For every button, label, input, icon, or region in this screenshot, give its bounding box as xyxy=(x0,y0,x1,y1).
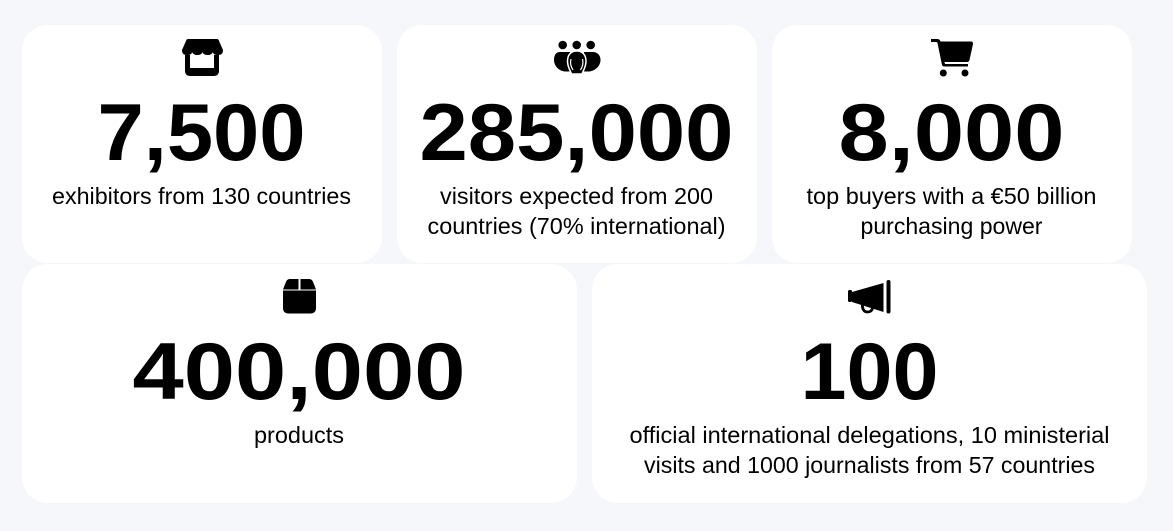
panel: delegations: visits and 1000 journalists from 57 countries xyxy=(644,452,1095,478)
panel: exhibitors xyxy=(22,25,382,263)
stat number: 100 xyxy=(800,327,938,417)
description: official international delegations, 10 ministerial xyxy=(630,422,1110,448)
stat number: 7,500 xyxy=(98,88,306,178)
description: exhibitors from 130 countries xyxy=(52,183,351,209)
panel: delegations xyxy=(592,264,1147,503)
icon: megaphone xyxy=(848,280,890,314)
stat number: 285,000 xyxy=(420,88,734,178)
panel: visitors: countries (70% international) xyxy=(428,213,726,239)
icon: storefront xyxy=(182,39,223,76)
panel: visitors xyxy=(397,25,757,263)
panel: buyers xyxy=(772,25,1132,263)
description: top buyers with a €50 billion xyxy=(806,183,1096,209)
stat number: 400,000 xyxy=(132,327,465,417)
icon: shopping cart xyxy=(931,39,973,76)
icon: group of people xyxy=(554,41,600,74)
panel: products xyxy=(22,264,577,503)
icon: box xyxy=(283,279,316,314)
description: visitors expected from 200 xyxy=(440,183,713,209)
panel: buyers: purchasing power xyxy=(860,213,1043,239)
description: products xyxy=(254,422,344,448)
stat number: 8,000 xyxy=(838,88,1064,178)
